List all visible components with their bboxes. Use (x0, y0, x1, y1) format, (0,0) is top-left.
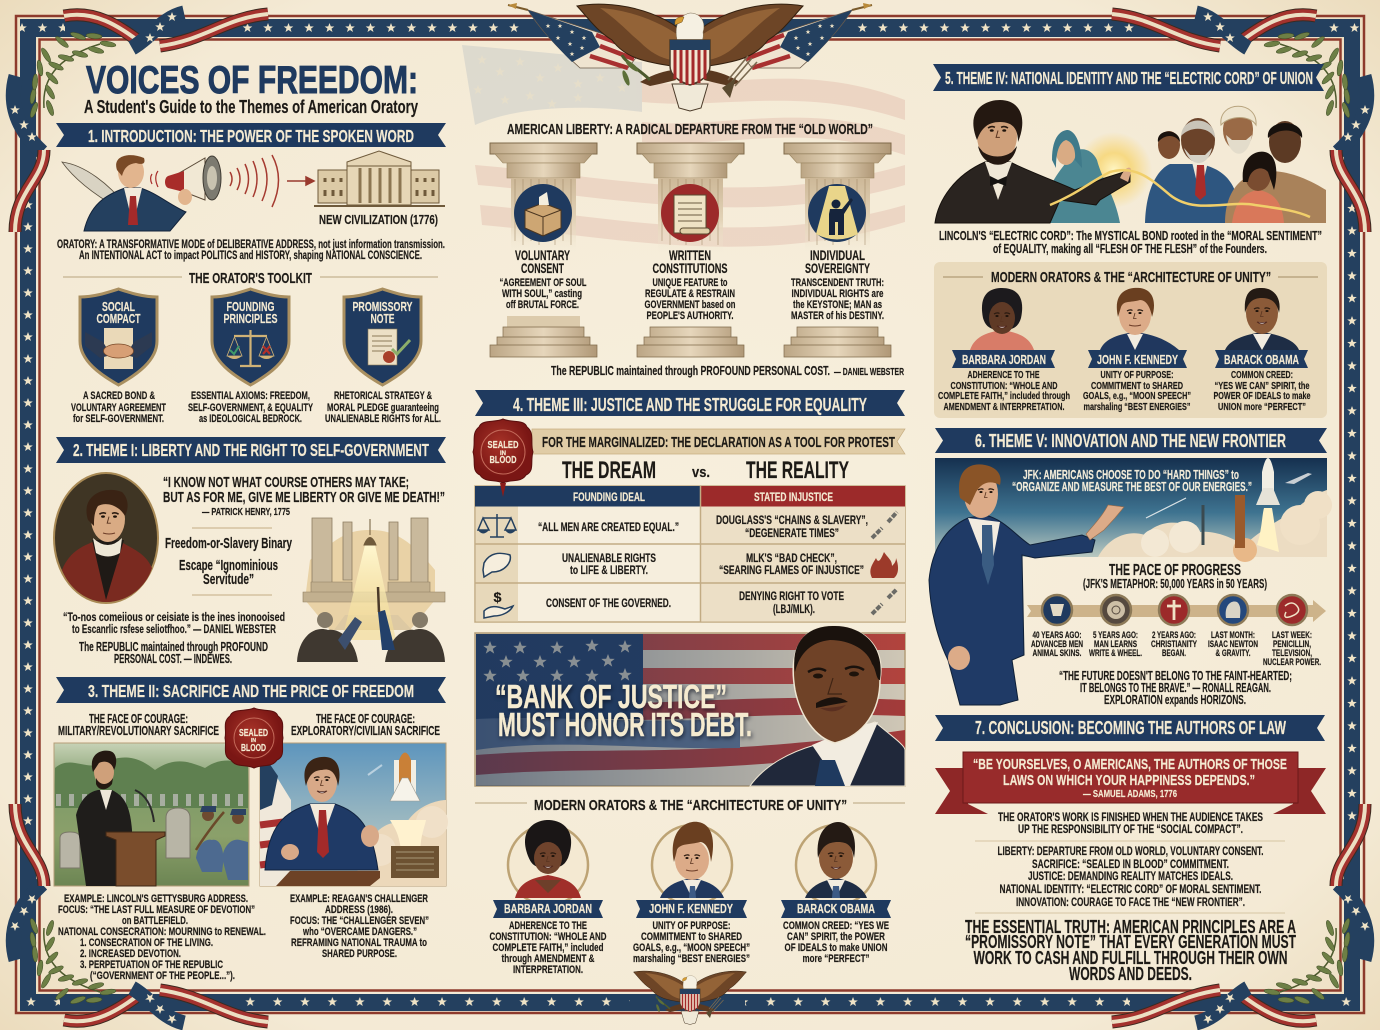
banner heading 6 (935, 428, 1327, 453)
badge caption: social compact: for SELF-GOVERNMENT. (73, 413, 164, 425)
text: written constitutions: REGULATE & RESTRAIN (645, 288, 735, 300)
timeline label: 2 years ago: BEGAN. (1162, 648, 1186, 659)
table header: STATED INJUSTICE (754, 490, 833, 504)
republic note: PERSONAL COST. — INDEWES. (114, 652, 232, 666)
badge: promissory note: NOTE (370, 312, 394, 326)
badge caption: promissory note: UNALIENABLE RIGHTS for ALL. (325, 413, 441, 425)
section 2: theme I liberty (54, 437, 446, 666)
essential truth: WORDS AND DEEDS. (1069, 964, 1192, 984)
section 5: theme IV national identity (933, 64, 1327, 418)
badge: social compact (80, 289, 157, 385)
badge: social compact: SOCIAL (102, 300, 135, 314)
badge: founding principles: PRINCIPLES (224, 312, 278, 326)
dream vs reality heading (562, 457, 849, 484)
text: voluntary consent: off BRUTAL FORCE. (506, 299, 579, 311)
table row: consent (484, 589, 897, 618)
subhead: military sacrifice (58, 712, 219, 738)
Challenger caption (290, 893, 429, 960)
timeline label: last week: PENICILLIN, (1273, 639, 1311, 650)
timeline label: last month: & GRAVITY. (1216, 648, 1250, 659)
pillar: voluntary consent (490, 143, 597, 357)
heading: AMERICAN LIBERTY: A RADICAL DEPARTURE FROM THE “OLD WORLD” (507, 121, 873, 138)
pace of progress heading: (JFK'S METAPHOR: 50,000 YEARS in 50 YEARS) (1083, 577, 1267, 591)
description: Barack Obama: more “PERFECT” (802, 953, 870, 965)
text: written constitutions: PEOPLE'S AUTHORITY. (646, 310, 734, 322)
Gettysburg caption: (“GOVERNMENT OF THE PEOPLE...”). (90, 970, 235, 982)
banner heading 4 (475, 390, 905, 416)
text: written constitutions: CONSTITUTIONS (652, 261, 728, 276)
key concepts: Freedom-or-Slavery Binary (165, 535, 292, 552)
text: individual sovereignty: the KEYSTONE; MAN as (793, 299, 882, 311)
caption: new civilization: NEW CIVILIZATION (1776) (319, 212, 438, 227)
wax seal: sealed in blood (justice) (473, 419, 533, 497)
Gettysburg caption: FOCUS: “THE LAST FULL MEASURE OF DEVOTION” (58, 904, 255, 916)
pillar: individual sovereignty (784, 143, 891, 357)
illustration: Lincoln's electric cord and diverse citizens (935, 100, 1326, 223)
text: voluntary consent: VOLUNTARY (515, 248, 570, 263)
description: Barbara Jordan (490, 920, 607, 976)
table row: rights (483, 551, 898, 578)
Patrick Henry quote (163, 474, 445, 518)
table row: rights: MLK'S “BAD CHECK”, (746, 551, 837, 565)
title: VOICES OF FREEDOM: (86, 59, 418, 102)
Gettysburg caption (58, 893, 266, 982)
orator: John F. Kennedy (652, 822, 732, 905)
toolkit heading: THE ORATOR'S TOOLKIT (189, 270, 312, 287)
name ribbon: Barbara Jordan: BARBARA JORDAN (504, 901, 592, 916)
timeline label: 40 years ago: ADVANCEB MEN (1031, 639, 1083, 650)
badge caption: promissory note (325, 390, 441, 425)
timeline arrow with medallions (1027, 595, 1326, 625)
description: Barbara Jordan: ADHERENCE TO THE (509, 920, 587, 932)
table row: rights: UNALIENABLE RIGHTS (562, 551, 656, 565)
panel: modern orators (934, 262, 1327, 418)
electric cord caption (939, 229, 1322, 256)
Challenger caption: FOCUS: THE “CHALLENGER SEVEN” (290, 915, 429, 927)
description: Barbara Jordan: ADHERENCE TO THE (968, 369, 1040, 381)
portrait: John F. Kennedy (1100, 288, 1179, 350)
badge: social compact: COMPACT (96, 312, 141, 326)
pace of progress heading (1083, 562, 1267, 591)
JFK quote over sky: “ORGANIZE AND MEASURE THE BEST OF OUR ENERGIES.” (1012, 480, 1252, 494)
icon: constitution scroll (661, 184, 719, 242)
Webster quote (garbled in source): to Escanrlic rsfese seliotfhoo.” — DANIEL WEBSTER (72, 622, 276, 636)
name ribbon: Barack Obama: BARACK OBAMA (797, 901, 875, 916)
JFK quote over sky (1012, 468, 1252, 494)
badge caption: social compact: A SACRED BOND & (83, 390, 155, 402)
timeline label: 2 years ago (1151, 630, 1197, 659)
key concepts: Escape “Ignominious (179, 557, 278, 574)
republic note (79, 640, 268, 666)
corner ribbon: top right (1112, 12, 1370, 232)
pace of progress heading: THE PACE OF PROGRESS (1109, 562, 1241, 579)
banner heading 3: 3. THEME II: SACRIFICE AND THE PRICE OF FREEDOM (88, 681, 414, 701)
Gettysburg caption: EXAMPLE: LINCOLN'S GETTYSBURG ADDRESS. (64, 893, 248, 905)
badge: promissory note: PROMISSORY (352, 300, 413, 314)
subhead: civilian sacrifice: EXPLORATORY/CIVILIAN SACRIFICE (291, 724, 440, 738)
Challenger caption: EXAMPLE: REAGAN'S CHALLENGER (290, 893, 428, 905)
description: Barack Obama: COMMON CREED: (1231, 369, 1293, 381)
name ribbon: John F. Kennedy (1088, 350, 1187, 368)
badge: founding principles (212, 289, 289, 385)
Gettysburg caption: on BATTLEFIELD. (122, 915, 188, 927)
timeline label: last week (1263, 630, 1321, 668)
Challenger caption: REFRAMING NATIONAL TRAUMA to (291, 937, 427, 949)
medallion: last week (1277, 595, 1307, 625)
Reagan quote: EXPLORATION expands HORIZONS. (1104, 692, 1246, 707)
slogan: MUST HONOR ITS DEBT. (498, 706, 752, 743)
description: Barbara Jordan: AMENDMENT & INTERPRETATION. (944, 401, 1065, 413)
orator: Barack Obama (796, 822, 876, 905)
table row: consent: DENYING RIGHT TO VOTE (739, 589, 844, 603)
description: Barack Obama: COMMON CREED: “YES WE (783, 920, 889, 932)
section: American liberty pillars (490, 121, 905, 378)
themes recap list: NATIONAL IDENTITY: “ELECTRIC CORD” OF MORAL SENTIMENT. (1000, 882, 1262, 896)
banner heading 1: 1. INTRODUCTION: THE POWER OF THE SPOKEN WORD (88, 126, 414, 146)
description: John F. Kennedy: COMMITMENT to SHARED (1091, 380, 1183, 392)
illustration: Reagan and Challenger (260, 743, 448, 886)
timeline label: last week: LAST WEEK: (1272, 630, 1312, 641)
text: individual sovereignty (791, 248, 884, 322)
description: John F. Kennedy: UNITY OF PURPOSE: (1100, 369, 1174, 381)
banner heading 3 (56, 677, 446, 703)
banner heading 5 (933, 64, 1324, 91)
section 6: theme V innovation (929, 428, 1332, 707)
timeline label: last month: ISAAC NEWTON (1208, 639, 1258, 650)
medallion: 2 years ago (1159, 595, 1189, 625)
timeline label: 40 years ago: 40 YEARS AGO: (1032, 630, 1082, 641)
wax seal: sealed in blood (justice): IN (500, 451, 506, 457)
description: Barack Obama: OF IDEALS to make UNION (784, 942, 888, 954)
description: Barack Obama: POWER OF IDEALS to make (1214, 390, 1311, 402)
table row: rights: “SEARING FLAMES OF INJUSTICE” (719, 563, 864, 577)
text: written constitutions: WRITTEN (669, 248, 711, 263)
corner ribbon: top left (10, 12, 268, 232)
figure: John F. Kennedy pointing (929, 464, 1124, 705)
text: written constitutions: UNIQUE FEATURE to (652, 277, 728, 289)
timeline label: 5 years ago: MAN LEARNS (1094, 639, 1137, 650)
banner heading 7 (935, 715, 1325, 741)
dream vs reality heading: THE DREAM (562, 457, 656, 484)
description: Barbara Jordan: COMPLETE FAITH,” included through (938, 390, 1070, 402)
name ribbon: John F. Kennedy (636, 900, 747, 918)
description: Barack Obama: CAN” SPIRIT, the POWER (787, 931, 885, 943)
slogan (495, 678, 752, 743)
illustration: orator with quill and megaphone (62, 155, 314, 231)
section 7: conclusion (935, 715, 1326, 984)
text: voluntary consent: WITH SOUL,” casting (502, 288, 582, 300)
description: John F. Kennedy: UNITY OF PURPOSE: (652, 920, 730, 932)
MLK portrait (750, 626, 905, 786)
name ribbon: John F. Kennedy: JOHN F. KENNEDY (649, 901, 733, 916)
timeline label: 40 years ago: ANIMAL SKINS. (1032, 648, 1082, 659)
badge caption: social compact: VOLUNTARY AGREEMENT (71, 402, 166, 414)
Webster attribution line: — DANIEL WEBSTER (834, 367, 905, 378)
description: John F. Kennedy: COMMITMENT to SHARED (641, 931, 742, 943)
Patrick Henry quote: — PATRICK HENRY, 1775 (202, 506, 290, 518)
description: Barbara Jordan: CONSTITUTION: “WHOLE AND (950, 380, 1058, 392)
table header: FOUNDING IDEAL (573, 490, 645, 504)
Gettysburg caption: NATIONAL CONSECRATION: MOURNING to RENEWAL. (58, 926, 266, 938)
section 3: theme II sacrifice (54, 677, 448, 982)
essential truth (965, 917, 1296, 984)
badge: founding principles: FOUNDING (226, 300, 274, 314)
name ribbon: Barbara Jordan (493, 900, 603, 918)
medallion: last month (1218, 595, 1248, 625)
text: voluntary consent: “AGREEMENT OF SOUL (500, 277, 587, 289)
timeline label: last week: NUCLEAR POWER. (1263, 657, 1321, 668)
subhead: civilian sacrifice (291, 712, 440, 738)
orator's work statement: UP THE RESPONSIBILITY OF THE “SOCIAL COMPACT”. (1018, 822, 1243, 836)
table row: equality: “DEGENERATE TIMES” (745, 526, 839, 540)
dream vs reality heading: vs. (692, 464, 710, 481)
red ribbon: Samuel Adams quote: — SAMUEL ADAMS, 1776 (1083, 788, 1177, 800)
faded flag behind centre column (462, 45, 905, 247)
banner heading 2: 2. THEME I: LIBERTY AND THE RIGHT TO SELF-GOVERNMENT (73, 440, 429, 460)
illustration: space launch scene (935, 458, 1332, 562)
timeline label: last month: LAST MONTH: (1211, 630, 1255, 641)
orator: Barbara Jordan (508, 820, 588, 905)
red ribbon: Samuel Adams quote (935, 752, 1326, 814)
themes recap list: INNOVATION: COURAGE TO FACE THE “NEW FRONTIER”. (1016, 895, 1245, 909)
text: individual sovereignty: SOVEREIGNTY (805, 261, 870, 276)
oratory definition: ORATORY: A TRANSFORMATIVE MODE of DELIBERATIVE ADDRESS, not just information transmission. (57, 239, 445, 251)
Gettysburg caption: 2. INCREASED DEVOTION. (80, 948, 181, 960)
timeline label: last month (1208, 630, 1258, 659)
group of citizens (1145, 106, 1326, 223)
oratory definition (57, 239, 445, 262)
orator's work statement (998, 810, 1263, 836)
medallion: 5 years ago (1101, 595, 1131, 625)
badge caption: promissory note: RHETORICAL STRATEGY & (334, 390, 432, 402)
table row: equality: “ALL MEN ARE CREATED EQUAL.” (538, 520, 679, 534)
text: written constitutions (644, 248, 736, 322)
table row: consent: CONSENT OF THE GOVERNED. (546, 596, 671, 610)
description: Barbara Jordan: through AMENDMENT & (502, 953, 595, 965)
badge caption: founding principles: ESSENTIAL AXIOMS: FREEDOM, (191, 390, 310, 402)
arrow to new civilization (287, 177, 314, 185)
table row: rights: to LIFE & LIBERTY. (570, 563, 648, 577)
text: individual sovereignty: TRANSCENDENT TRUTH: (791, 277, 884, 289)
themes recap list: SACRIFICE: “SEALED IN BLOOD” COMMITMENT. (1032, 857, 1229, 871)
subhead: civilian sacrifice: THE FACE OF COURAGE: (316, 712, 415, 726)
wax seal: sealed in blood (225, 708, 283, 768)
top eagle with flags (508, 3, 872, 111)
corner ribbon: bottom left (10, 804, 268, 1024)
table header (573, 490, 833, 504)
Gettysburg caption: 1. CONSECRATION OF THE LIVING. (80, 937, 213, 949)
description: John F. Kennedy: GOALS, e.g., “MOON SPEECH” (633, 942, 750, 954)
name ribbon: John F. Kennedy: JOHN F. KENNEDY (1097, 353, 1178, 367)
name ribbon: Barbara Jordan: BARBARA JORDAN (962, 353, 1046, 367)
themes recap list: LIBERTY: DEPARTURE FROM OLD WORLD, VOLUNTARY CONSENT. (998, 844, 1264, 858)
subhead: military sacrifice: MILITARY/REVOLUTIONARY SACRIFICE (58, 724, 219, 738)
description: Barack Obama (1214, 369, 1311, 413)
wax seal: sealed in blood: BLOOD (241, 742, 266, 754)
Webster attribution line: The REPUBLIC maintained through PROFOUND PERSONAL COST. (551, 363, 830, 378)
timeline label: 2 years ago: CHRISTIANITY (1151, 639, 1197, 650)
wax seal: sealed in blood (justice): BLOOD (490, 455, 516, 466)
corner ribbon: bottom right (1112, 804, 1370, 1024)
comparison table (475, 486, 905, 622)
text: voluntary consent: CONSENT (521, 261, 564, 276)
Webster quote (garbled in source) (63, 610, 285, 636)
portrait: Barack Obama (1225, 288, 1299, 350)
portrait: Barbara Jordan (970, 288, 1034, 350)
timeline label: 5 years ago: WRITE & WHEEL. (1089, 648, 1142, 659)
themes recap list: JUSTICE: DEMANDING REALITY MATCHES IDEALS. (1028, 869, 1233, 883)
subtitle: A Student's Guide to the Themes of American Oratory (84, 97, 418, 117)
illustration: hall of independence with spotlight (297, 518, 445, 662)
Webster quote (garbled in source): “To-nos comeiious or ceisiate is the ines inonooised (63, 610, 285, 624)
name ribbon: Barack Obama (1215, 350, 1308, 368)
section 4: theme III justice (473, 390, 905, 976)
name ribbon: Barbara Jordan (952, 350, 1055, 368)
description: John F. Kennedy (1083, 369, 1191, 413)
description: John F. Kennedy: marshaling “BEST ENERGIES” (1084, 401, 1190, 413)
badge caption: promissory note: MORAL PLEDGE guaranteeing (327, 402, 439, 414)
description: Barbara Jordan: CONSTITUTION: “WHOLE AND (490, 931, 607, 943)
description: John F. Kennedy: marshaling “BEST ENERGIES” (633, 953, 750, 965)
electric cord (1050, 170, 1310, 217)
badge caption: founding principles: SELF-GOVERNMENT, & EQUALITY (188, 402, 313, 414)
banner heading 1 (56, 123, 446, 147)
key concepts: Servitude” (203, 571, 254, 588)
wax seal: sealed in blood (justice): SEALED (488, 440, 518, 451)
text: voluntary consent (500, 248, 587, 311)
text: written constitutions: GOVERNMENT based on (644, 299, 736, 311)
key concepts (165, 528, 292, 595)
banner heading 4: 4. THEME III: JUSTICE AND THE STRUGGLE FOR EQUALITY (513, 395, 867, 415)
badge caption: social compact (71, 390, 166, 425)
description: Barack Obama: UNION more “PERFECT” (1218, 401, 1306, 413)
Patrick Henry quote: BUT AS FOR ME, GIVE ME LIBERTY OR GIVE ME DEATH!” (163, 489, 445, 506)
faded flag stars (473, 55, 627, 108)
Gettysburg caption: 3. PERPETUATION OF THE REPUBLIC (80, 959, 223, 971)
subhead: military sacrifice: THE FACE OF COURAGE: (89, 712, 188, 726)
timeline label: last week: TELEVISION, (1272, 648, 1312, 659)
table row: equality (478, 512, 897, 540)
text: individual sovereignty: INDIVIDUAL (810, 248, 865, 263)
banner heading 2 (56, 437, 446, 463)
wax seal: sealed in blood: SEALED (239, 727, 268, 739)
timeline label: 5 years ago: 5 YEARS AGO: (1093, 630, 1138, 641)
bottom eagle emblem (634, 971, 746, 1024)
JFK quote over sky: JFK: AMERICANS CHOOSE TO DO “HARD THINGS” to (1023, 468, 1239, 482)
text: individual sovereignty: INDIVIDUAL RIGHTS are (792, 288, 884, 300)
slogan: “BANK OF JUSTICE” (495, 678, 727, 715)
badge: promissory note (344, 289, 421, 385)
Patrick Henry quote: “I KNOW NOT WHAT COURSE OTHERS MAY TAKE; (163, 474, 409, 491)
badge caption: founding principles (188, 390, 313, 425)
illustration: new civilization building (314, 151, 445, 227)
banner illustration: bank of justice with MLK (475, 626, 905, 786)
name ribbon: Barack Obama: BARACK OBAMA (1224, 353, 1299, 367)
description: Barbara Jordan: COMPLETE FAITH,” included (492, 942, 604, 954)
Challenger caption: SHARED PURPOSE. (322, 948, 397, 960)
Reagan quote (1059, 668, 1292, 707)
modern orators heading: MODERN ORATORS & THE “ARCHITECTURE OF UNITY” (534, 797, 847, 814)
medallion: 40 years ago (1042, 595, 1072, 625)
table row: consent: (LBJ/MLK). (773, 602, 815, 616)
text: individual sovereignty: MASTER of his DESTINY. (791, 310, 884, 322)
description: Barack Obama: “YES WE CAN” SPIRIT, the (1214, 380, 1310, 392)
wax seal: sealed in blood: IN (251, 738, 256, 744)
section 1: introduction (56, 123, 446, 425)
Challenger caption: who “OVERCAME DANGERS.” (302, 926, 417, 938)
orator's work statement: THE ORATOR'S WORK IS FINISHED WHEN THE AUDIENCE TAKES (998, 810, 1263, 824)
illustration: Lincoln at Gettysburg (54, 743, 249, 886)
title (84, 59, 418, 117)
table row: consent: $ (494, 589, 502, 605)
republic note: The REPUBLIC maintained through PROFOUND (79, 640, 268, 654)
red ribbon: Samuel Adams quote: LAWS ON WHICH YOUR HAPPINESS DEPENDS.” (1003, 772, 1255, 789)
table row: equality: DOUGLASS'S “CHAINS & SLAVERY”, (716, 513, 868, 527)
oratory definition: An INTENTIONAL ACT to impact POLITICS and HISTORY, shaping NATIONAL CONSCIENCE. (79, 250, 422, 262)
description: Barbara Jordan: INTERPRETATION. (513, 964, 583, 976)
themes recap list (975, 841, 1285, 913)
description: John F. Kennedy: GOALS, e.g., “MOON SPEECH” (1083, 390, 1191, 402)
timeline label: 5 years ago (1089, 630, 1142, 659)
ribbon: for the marginalized (532, 429, 905, 454)
portrait: Patrick Henry (54, 473, 158, 603)
pillar: written constitutions (637, 143, 744, 357)
description: John F. Kennedy (633, 920, 750, 965)
Challenger caption: ADDRESS (1986). (325, 904, 393, 916)
badge caption: founding principles: as IDEOLOGICAL BEDROCK. (199, 413, 302, 425)
icon: individual in spotlight (808, 184, 866, 242)
ribbon: for the marginalized: FOR THE MARGINALIZED: THE DECLARATION AS A TOOL FOR PROTEST (542, 434, 895, 451)
timeline label: 40 years ago (1031, 630, 1083, 659)
electric cord caption: of EQUALITY, making all “FLESH OF THE FLESH” of the Founders. (993, 242, 1267, 256)
timeline label: 2 years ago: 2 YEARS AGO: (1152, 630, 1196, 641)
dream vs reality heading: THE REALITY (746, 457, 849, 484)
description: Barack Obama (783, 920, 889, 965)
icon: ballot box (514, 184, 572, 242)
name ribbon: Barack Obama (781, 900, 891, 918)
description: Barbara Jordan (938, 369, 1070, 413)
